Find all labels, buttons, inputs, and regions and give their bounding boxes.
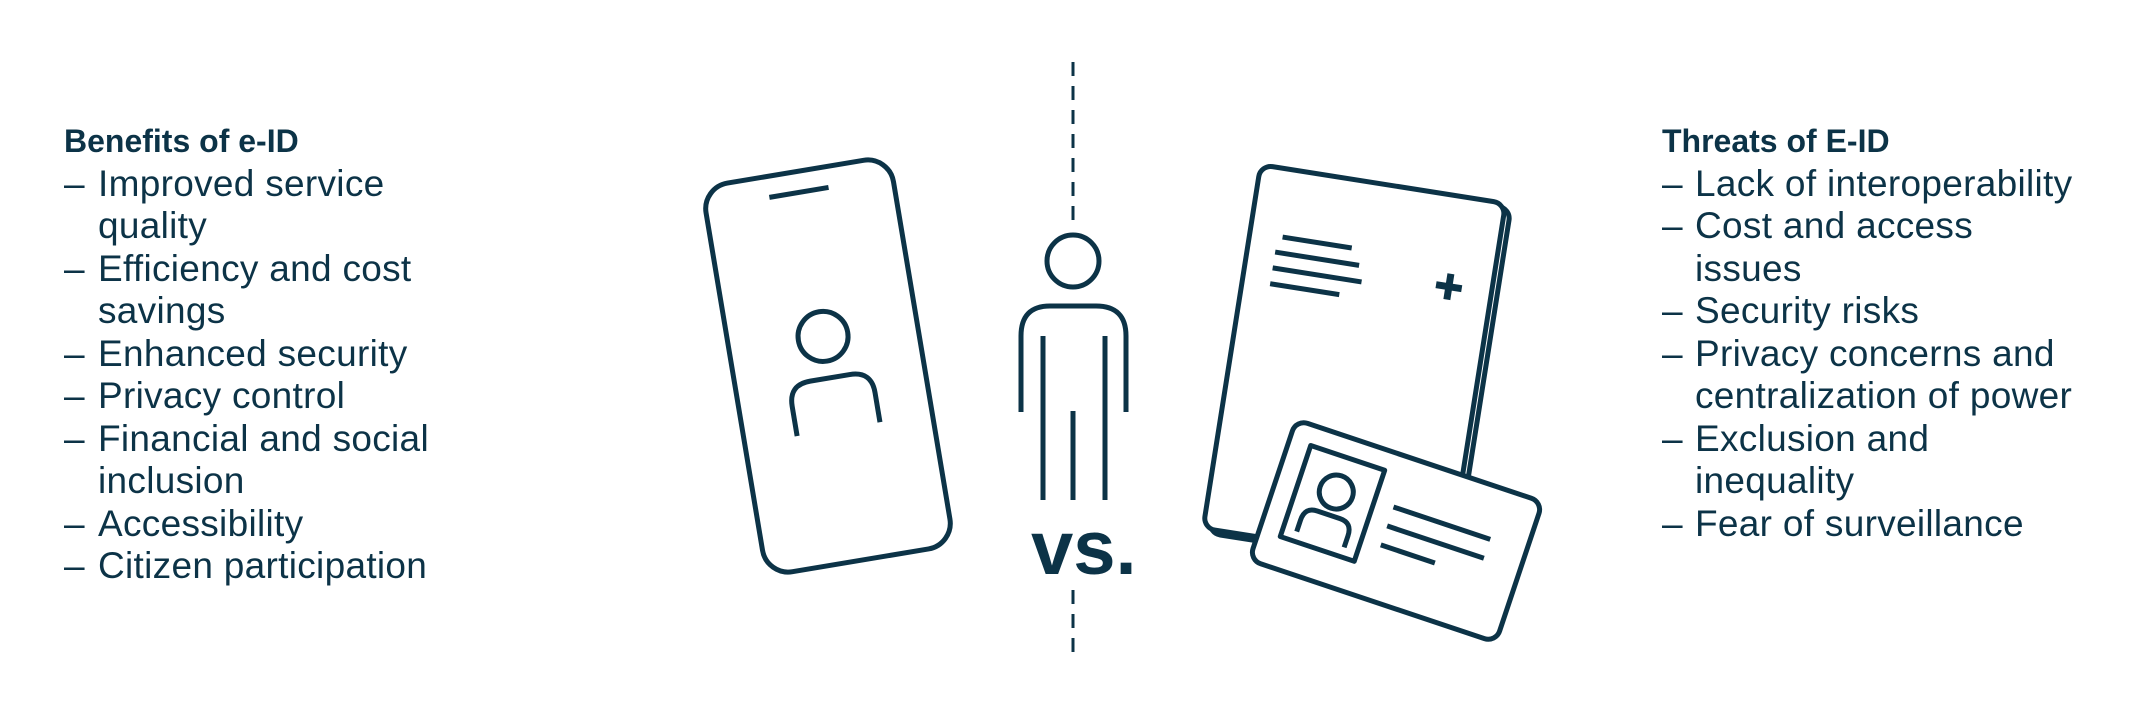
heading: benefits: Benefits of e-ID [64,123,299,159]
list: benefits: Efficiency and cost [98,248,412,289]
list: threats: – [1662,333,1683,374]
list: threats: – [1662,503,1683,544]
label: vs.: vs. [1031,506,1137,591]
list: threats [1662,163,2072,544]
list: threats: Privacy concerns and [1695,333,2055,374]
icon: passport [1202,165,1512,572]
heading: threats: Threats of E-ID [1662,123,1890,159]
list: threats: centralization of power [1695,375,2072,416]
icon: id card [1249,420,1543,642]
list: benefits: Privacy control [98,375,345,416]
list: threats: Exclusion and [1695,418,1929,459]
list: benefits: – [64,163,85,204]
list: threats: Fear of surveillance [1695,503,2024,544]
list: threats: – [1662,418,1683,459]
list: benefits: – [64,333,85,374]
list: benefits: – [64,418,85,459]
list: threats: – [1662,290,1683,331]
panel: benefits [64,123,429,586]
list: threats: issues [1695,248,1802,289]
list: benefits: – [64,545,85,586]
divider dashed line [1072,62,1074,652]
panel: threats [1662,123,2072,544]
list: benefits: savings [98,290,226,331]
list: threats: Cost and access [1695,205,1973,246]
icon: phone [702,156,954,576]
list: benefits: – [64,503,85,544]
list: benefits: quality [98,205,207,246]
list: benefits: Improved service [98,163,385,204]
list: benefits: Accessibility [98,503,303,544]
list: benefits: Financial and social [98,418,429,459]
list: benefits: Enhanced security [98,333,408,374]
list: threats: inequality [1695,460,1854,501]
list: benefits: – [64,248,85,289]
list: benefits [64,163,429,586]
list: threats: Security risks [1695,290,1919,331]
list: benefits: – [64,375,85,416]
list: threats: – [1662,205,1683,246]
icon: person [1021,235,1126,500]
list: benefits: Citizen participation [98,545,427,586]
list: threats: – [1662,163,1683,204]
list: benefits: inclusion [98,460,245,501]
list: threats: Lack of interoperability [1695,163,2072,204]
